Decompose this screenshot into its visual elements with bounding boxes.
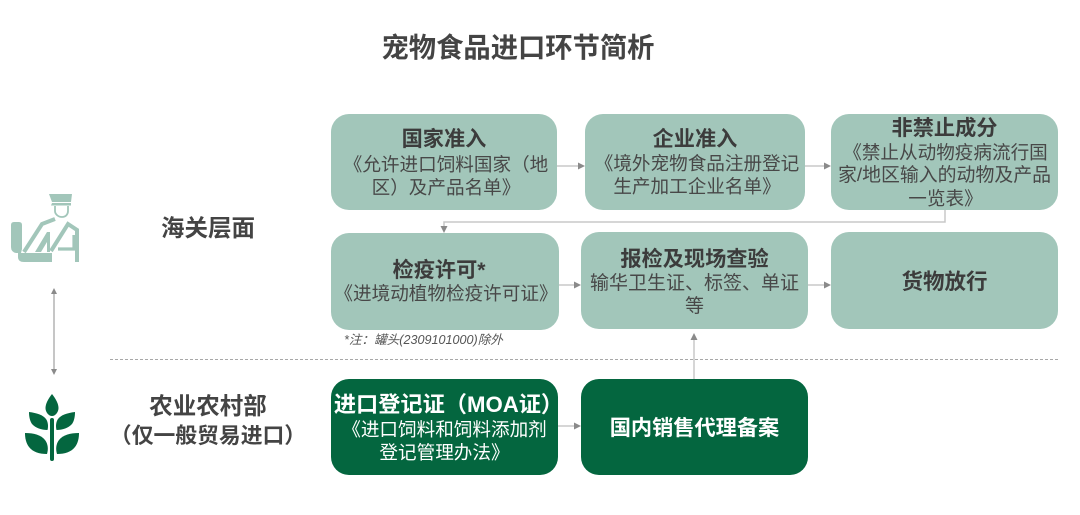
panel: quarantine permit: 检疫许可* [392,259,486,282]
title: 宠物食品进口环节简析 [382,32,654,63]
panel: inspection [581,232,808,329]
panel: quarantine permit: 《进境动植物检疫许可证》 [334,283,558,304]
label: ministry of agriculture [110,393,306,448]
panel: MOA certificate: 《进口饲料和饲料添加剂 [342,419,547,440]
panel: inspection: 输华卫生证、标签、单证 [590,273,799,294]
panel: enterprise access: 生产加工企业名单》 [613,176,781,197]
panel: inspection: 等 [685,296,704,317]
panel: non-prohibited ingredients: 家/地区输入的动物及产品 [838,165,1051,186]
label: customs level: 海关层面 [161,215,255,241]
panel: non-prohibited ingredients: 一览表》 [908,188,983,209]
label: ministry of agriculture: （仅一般贸易进口） [110,423,306,448]
panel: enterprise access: 企业准入 [653,128,737,151]
panel: quarantine permit [331,233,559,330]
panel: non-prohibited ingredients: 《禁止从动物疫病流行国 [843,142,1048,163]
panel: MOA certificate: 进口登记证（MOA证） [334,392,563,417]
panel: non-prohibited ingredients: 非禁止成分 [892,117,997,140]
panel: country access: 《允许进口饲料国家（地 [344,154,548,175]
panel: country access: 区）及产品名单》 [372,177,520,198]
panel: country access: 国家准入 [402,128,486,151]
panel: domestic sales agent filing [581,379,808,475]
panel: MOA certificate: 登记管理办法》 [379,442,510,463]
panel: MOA certificate [331,379,558,475]
panel: non-prohibited ingredients [831,114,1058,210]
panel: country access [331,114,557,210]
label: ministry of agriculture: 农业农村部 [149,393,267,419]
panel: cargo release: 货物放行 [901,270,988,294]
panel: enterprise access: 《境外宠物食品注册登记 [595,153,799,174]
panel: domestic sales agent filing: 国内销售代理备案 [610,417,779,440]
footnote: *注：罐头(2309101000)除外 [344,333,503,347]
panel: inspection: 报检及现场查验 [620,248,769,271]
panel: cargo release [831,232,1058,329]
panel: enterprise access [585,114,805,210]
